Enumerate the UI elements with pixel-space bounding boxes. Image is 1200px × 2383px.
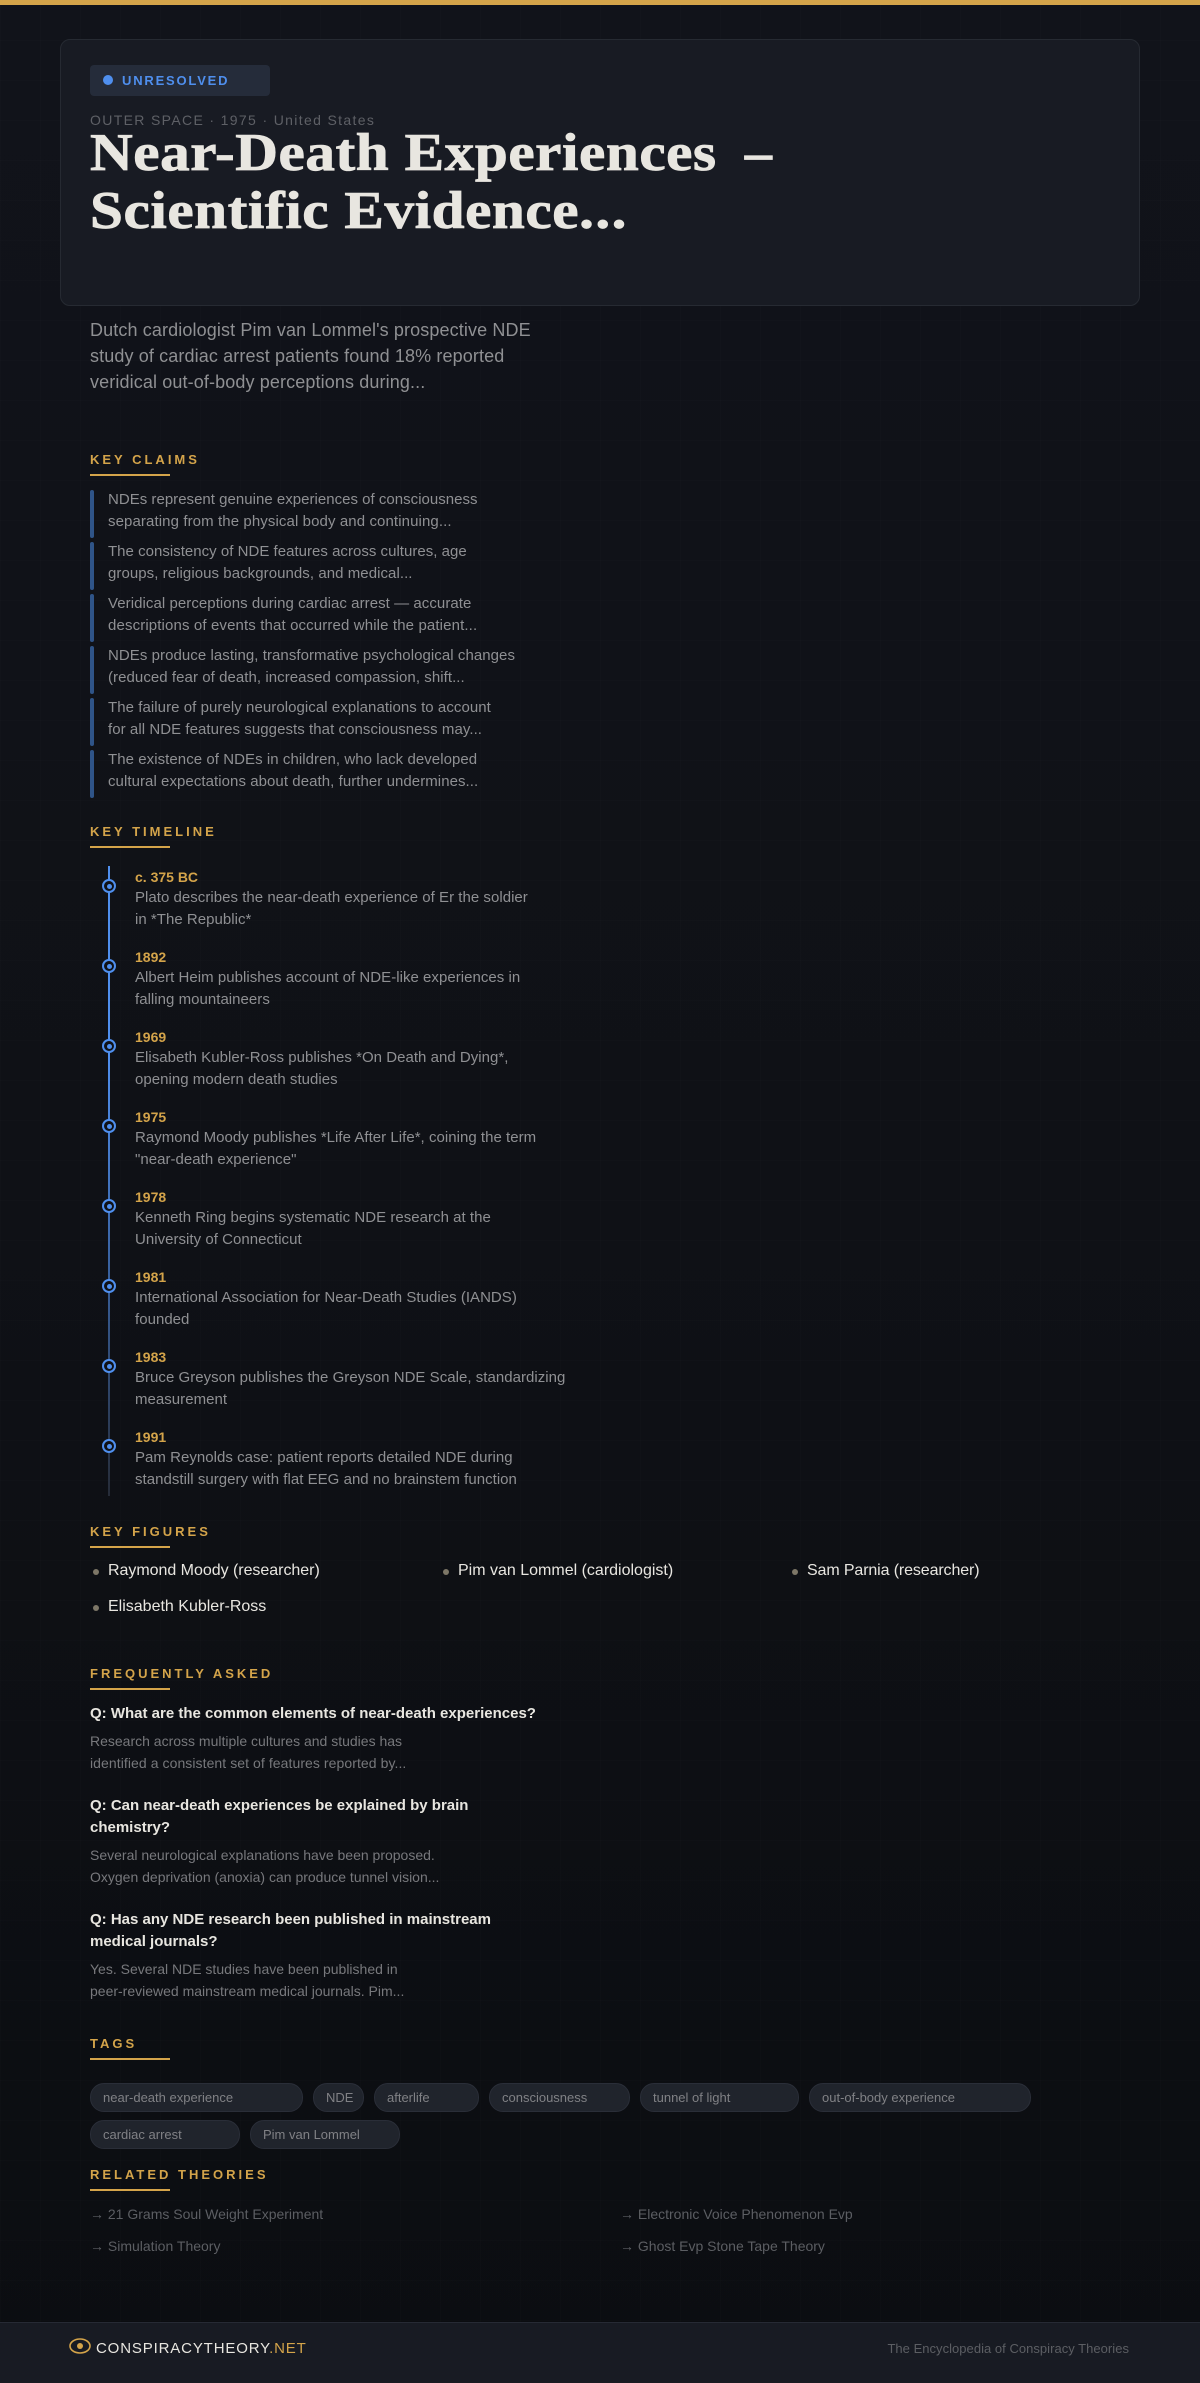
faq 3: peer-reviewed mainstream medical journals. Pim... (90, 1983, 404, 1999)
related link: → Electronic Voice Phenomenon Evp (620, 2206, 853, 2222)
event: 1983 (102, 1349, 565, 1408)
claim 5: for all NDE features suggests that consciousness may... (108, 721, 482, 738)
event: 1892: Albert Heim publishes account of NDE-like experiences in (135, 969, 520, 986)
claim 2: The consistency of NDE features across cultures, age (108, 543, 467, 560)
faq 1: Research across multiple cultures and studies has (90, 1733, 402, 1749)
event: 1892 (102, 949, 520, 1008)
claim 6: cultural expectations about death, further undermines... (108, 773, 478, 790)
tag: Pim van Lommel (263, 2127, 360, 2142)
faq 2 (90, 1797, 468, 1885)
figure: Sam Parnia: Sam Parnia (researcher) (807, 1562, 979, 1579)
event: 1975: Raymond Moody publishes *Life After Life*, coining the term (135, 1129, 536, 1146)
faq 2: Oxygen deprivation (anoxia) can produce tunnel vision... (90, 1869, 439, 1885)
tag: cardiac arrest (103, 2127, 182, 2142)
summary text (90, 320, 531, 392)
claim 3: descriptions of events that occurred while the patient... (108, 617, 477, 634)
event: 1981: 1981 (135, 1269, 166, 1285)
event: 1981: founded (135, 1311, 189, 1328)
summary text: study of cardiac arrest patients found 18% reported (90, 346, 504, 366)
event: 1969: 1969 (135, 1029, 166, 1045)
faq 1: identified a consistent set of features reported by... (90, 1755, 406, 1771)
title: Scientific Evidence... (90, 182, 628, 240)
event: 1969: Elisabeth Kubler-Ross publishes *On Death and Dying*, (135, 1049, 508, 1066)
tag: consciousness (502, 2090, 587, 2105)
badge label: UNRESOLVED (122, 73, 229, 88)
event: 1991: 1991 (135, 1429, 166, 1445)
summary text: veridical out-of-body perceptions during... (90, 372, 425, 392)
claim 1: separating from the physical body and continuing... (108, 513, 452, 530)
panel: key figures list (93, 1562, 979, 1615)
claim 6 (90, 750, 478, 798)
title (90, 124, 773, 240)
claim 4: (reduced fear of death, increased compassion, shift... (108, 669, 465, 686)
related link: → Simulation Theory (90, 2238, 220, 2254)
icon: status dot (103, 75, 113, 85)
top accent bar (0, 0, 1200, 5)
title: Near-Death Experiences (90, 124, 717, 182)
event: 1975: "near-death experience" (135, 1151, 296, 1168)
heading: related theories: RELATED THEORIES (90, 2167, 268, 2182)
figure: Raymond Moody: Raymond Moody (researcher) (108, 1562, 320, 1579)
faq 1: Q: What are the common elements of near-death experiences? (90, 1705, 536, 1722)
panel: key claims list (90, 490, 515, 798)
panel: related theories (90, 2206, 853, 2254)
claim 5: The failure of purely neurological explanations to account (108, 699, 491, 716)
faq 1 (90, 1705, 536, 1771)
status badge: unresolved (90, 65, 270, 96)
event: 1983: 1983 (135, 1349, 166, 1365)
tag: out-of-body experience (822, 2090, 955, 2105)
claim 4: NDEs produce lasting, transformative psychological changes (108, 647, 515, 664)
event: 1983: Bruce Greyson publishes the Greyson NDE Scale, standardizing (135, 1369, 565, 1386)
faq 3 (90, 1911, 491, 1999)
event: c. 375 BC: Plato describes the near-death experience of Er the soldier (135, 889, 528, 906)
tag: afterlife (387, 2090, 430, 2105)
faq 2: Several neurological explanations have been proposed. (90, 1847, 435, 1863)
event: 1991: Pam Reynolds case: patient reports detailed NDE during (135, 1449, 513, 1466)
event: 1892: falling mountaineers (135, 991, 270, 1008)
claim 4 (90, 646, 515, 694)
claim 2 (90, 542, 467, 590)
event: 1983: measurement (135, 1391, 227, 1408)
heading: tags: TAGS (90, 2036, 137, 2051)
event: c. 375 BC: c. 375 BC (135, 869, 198, 885)
tag (313, 2083, 364, 2112)
claim 1: NDEs represent genuine experiences of consciousness (108, 491, 478, 508)
event: 1975: 1975 (135, 1109, 166, 1125)
figure: Elisabeth Kubler-Ross: Elisabeth Kubler-Ross (108, 1598, 266, 1615)
heading: frequently asked: FREQUENTLY ASKED (90, 1666, 273, 1681)
meta line: OUTER SPACE · 1975 · United States (90, 112, 375, 128)
event: 1991: standstill surgery with flat EEG and no brainstem function (135, 1471, 517, 1488)
event: 1981: International Association for Near-Death Studies (IANDS) (135, 1289, 517, 1306)
tag: tunnel of light (653, 2090, 730, 2105)
title: — (744, 124, 772, 182)
faq 3: Q: Has any NDE research been published in mainstream (90, 1911, 491, 1928)
tag (809, 2083, 1031, 2112)
tag (90, 2083, 303, 2112)
event: 1991 (102, 1429, 517, 1488)
tag: NDE (326, 2090, 353, 2105)
faq 3: medical journals? (90, 1933, 218, 1950)
event: 1978: University of Connecticut (135, 1231, 302, 1248)
icon: eye logo (69, 2338, 91, 2354)
claim 3 (90, 594, 477, 642)
event: 1978: Kenneth Ring begins systematic NDE research at the (135, 1209, 491, 1226)
claim 1 (90, 490, 478, 538)
heading: key figures: KEY FIGURES (90, 1524, 211, 1539)
figure: Pim van Lommel: Pim van Lommel (cardiologist) (458, 1562, 673, 1579)
event: 1969: opening modern death studies (135, 1071, 338, 1088)
footer (0, 2322, 1200, 2383)
faq 2: chemistry? (90, 1819, 170, 1836)
tag (640, 2083, 799, 2112)
faq 3: Yes. Several NDE studies have been published in (90, 1961, 398, 1977)
tag (90, 2120, 240, 2149)
tag (489, 2083, 630, 2112)
footer tagline: The Encyclopedia of Conspiracy Theories (887, 2341, 1129, 2356)
event: 1892: 1892 (135, 949, 166, 965)
tag (374, 2083, 479, 2112)
claim 3: Veridical perceptions during cardiac arrest — accurate (108, 595, 471, 612)
claim 5 (90, 698, 491, 746)
timeline axis (108, 866, 110, 1496)
panel: tags (90, 2083, 1031, 2149)
event: 1975 (102, 1109, 536, 1168)
event: 1978 (102, 1189, 491, 1248)
heading: key timeline: KEY TIMELINE (90, 824, 217, 839)
related link: → 21 Grams Soul Weight Experiment (90, 2206, 323, 2222)
tag (250, 2120, 400, 2149)
tag: near-death experience (103, 2090, 233, 2105)
event: c. 375 BC (102, 869, 528, 928)
footer brand: CONSPIRACYTHEORY.NET (96, 2340, 307, 2357)
claim 2: groups, religious backgrounds, and medical... (108, 565, 413, 582)
faq 2: Q: Can near-death experiences be explained by brain (90, 1797, 468, 1814)
chart: timeline (108, 866, 110, 1496)
related link: → Ghost Evp Stone Tape Theory (620, 2238, 825, 2254)
event: 1969 (102, 1029, 508, 1088)
event: 1978: 1978 (135, 1189, 166, 1205)
claim 6: The existence of NDEs in children, who lack developed (108, 751, 477, 768)
panel: hero (60, 39, 1140, 306)
summary text: Dutch cardiologist Pim van Lommel's prospective NDE (90, 320, 531, 340)
heading: key claims: KEY CLAIMS (90, 452, 200, 467)
event: 1981 (102, 1269, 517, 1328)
event: c. 375 BC: in *The Republic* (135, 911, 251, 928)
